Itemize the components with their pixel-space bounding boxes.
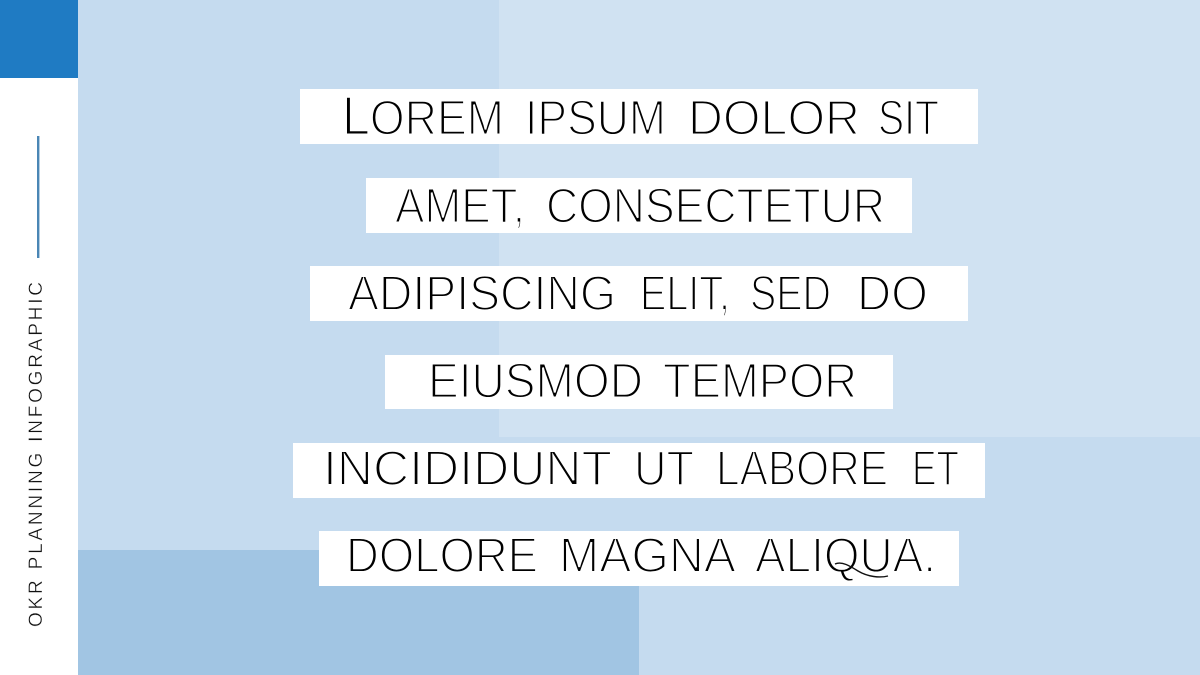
background panel: bottom left mid blue — [78, 550, 639, 675]
line 5: ET — [912, 442, 959, 496]
line 5: INCIDIDUNT — [323, 442, 612, 496]
line 2: AMET, — [395, 180, 525, 234]
line 1: DOLOR — [688, 92, 860, 146]
line 4 — [385, 354, 893, 409]
background panel: top right pale blue — [499, 0, 1200, 437]
line 3: SED — [750, 267, 831, 321]
line 3 — [310, 266, 968, 321]
quote text block — [293, 84, 985, 586]
line 6: ALIQUA. — [755, 529, 936, 583]
line 1 — [300, 84, 978, 146]
line 1: IPSUM — [525, 92, 666, 146]
line 2: CONSECTETUR — [546, 180, 885, 234]
sidebar: white strip — [0, 0, 78, 675]
line 3: ADIPISCING — [348, 267, 616, 321]
background panel: left light blue — [78, 0, 499, 675]
line 5 — [293, 442, 985, 498]
sidebar accent line — [37, 136, 39, 258]
line 6: MAGNA — [559, 529, 736, 583]
line 5: UT — [634, 442, 694, 496]
line 1: SIT — [878, 92, 939, 146]
corner block: solid blue square — [0, 0, 78, 78]
line 6 — [319, 529, 959, 586]
line 4: EIUSMOD — [428, 354, 643, 408]
line 3: DO — [857, 267, 928, 321]
line 6: DOLORE — [346, 529, 538, 583]
background panel: bottom right light blue — [499, 437, 1200, 675]
line 5: LABORE — [716, 442, 888, 496]
line 2 — [366, 178, 912, 234]
line 1: LOREM — [342, 84, 504, 146]
sidebar vertical title: OKR PLANNING INFOGRAPHIC — [26, 282, 47, 627]
line 4: TEMPOR — [663, 354, 857, 408]
line 3: ELIT, — [640, 267, 730, 321]
